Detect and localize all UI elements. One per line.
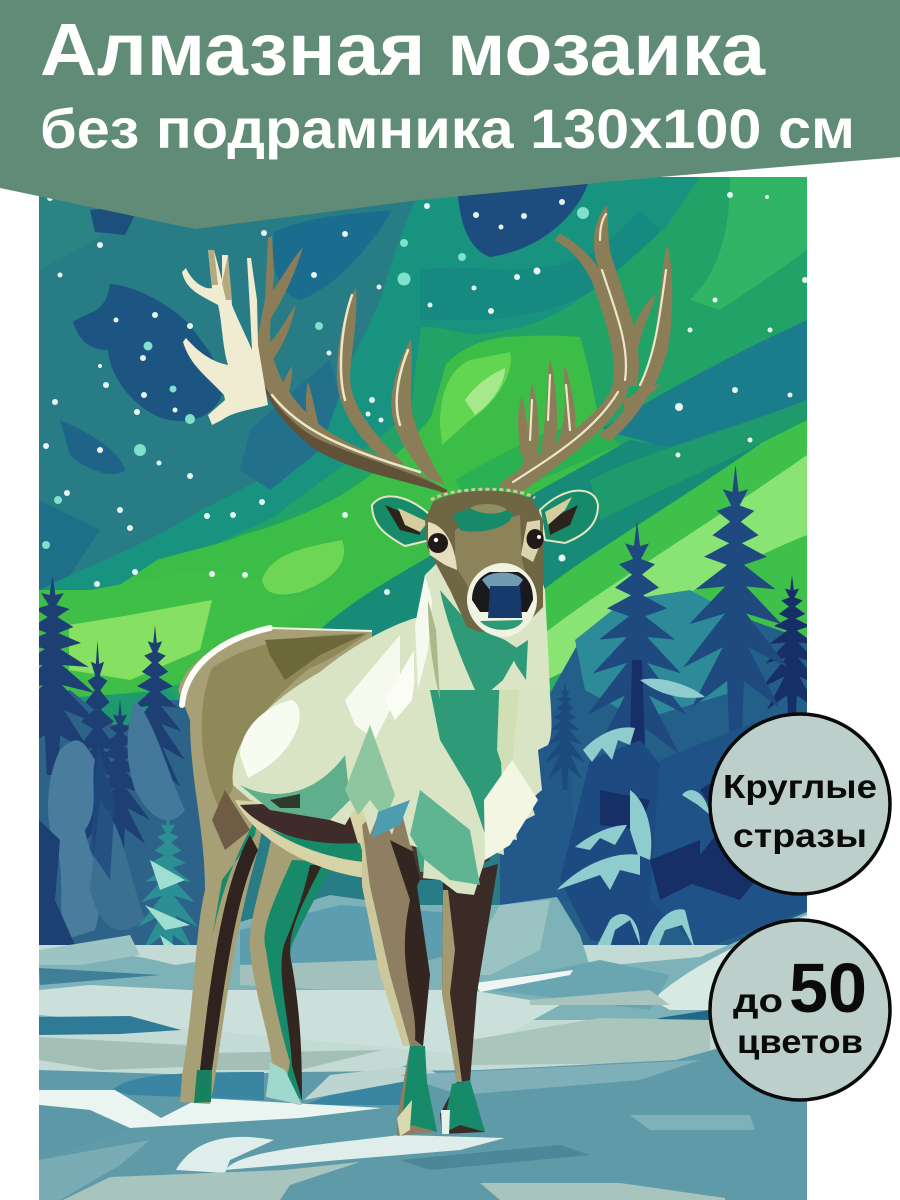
subtitle: без подрамника 130х100 см [40, 97, 855, 160]
badge: round rhinestones: Круглые [723, 768, 877, 805]
left antler tines [256, 236, 447, 494]
snow laden branches [557, 679, 710, 965]
belly [235, 800, 370, 878]
badge: up to 50 colours: цветов [737, 1023, 863, 1060]
far hind leg [250, 835, 335, 1105]
snow ground [39, 895, 807, 1200]
badge: up to 50 colours [710, 920, 890, 1100]
left antler [182, 236, 447, 494]
reindeer [178, 208, 671, 1136]
forest: right pines [500, 465, 822, 967]
teal glowing stars [42, 207, 589, 549]
cream shoulder and body fur [233, 618, 551, 895]
badge: round rhinestones [710, 714, 890, 894]
header ribbon [0, 0, 900, 229]
near front leg [362, 790, 490, 1136]
badge: up to 50 colours: 50 [789, 949, 867, 1027]
neck [414, 560, 550, 700]
badge: round rhinestones: стразы [733, 817, 867, 854]
near hind leg and rump [178, 628, 372, 1104]
forest: left pines [39, 576, 205, 945]
muzzle and nose [467, 563, 537, 637]
right antler [500, 208, 671, 492]
far front leg [440, 864, 498, 1134]
head [425, 489, 544, 632]
night sky with aurora bands [39, 177, 807, 977]
title: Алмазная мозаика [40, 8, 766, 91]
ears [372, 491, 598, 546]
painting: reindeer under the northern lights [5, 177, 822, 1200]
stars [43, 192, 808, 595]
badge: up to 50 colours: до [733, 982, 783, 1019]
white antler palm [182, 250, 268, 425]
